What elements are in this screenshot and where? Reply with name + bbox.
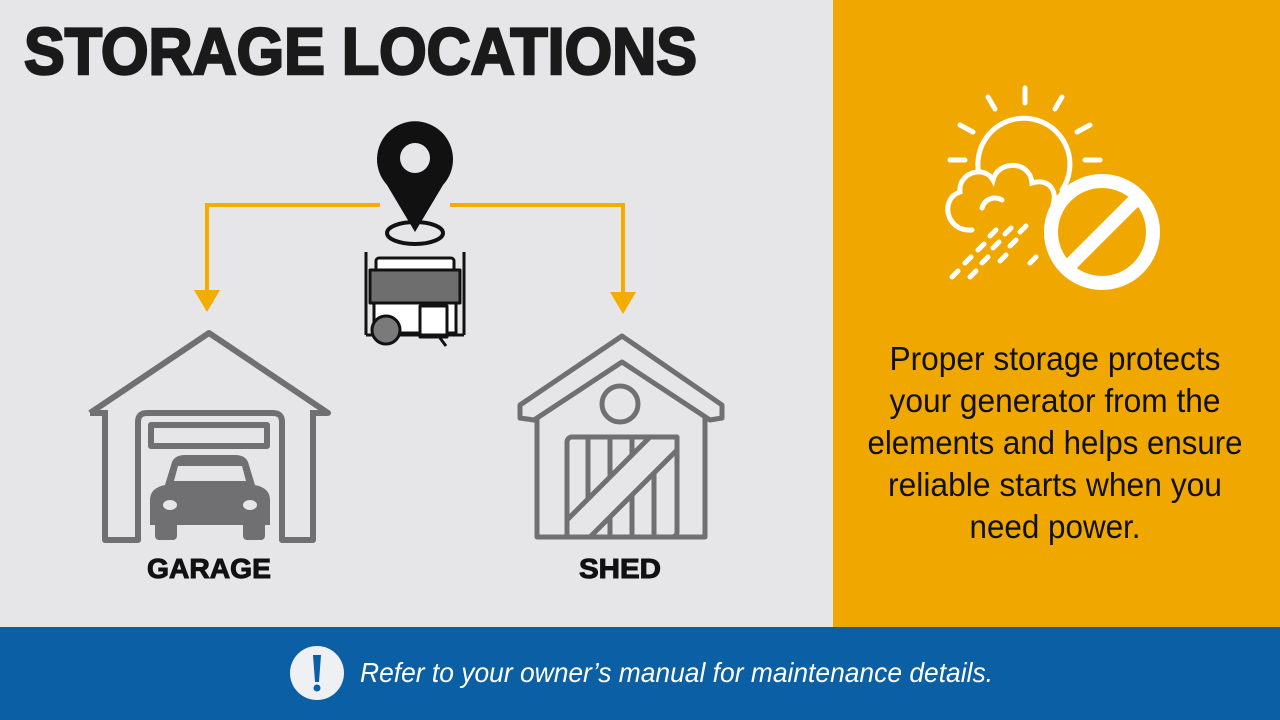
text: footer note: Refer to your owner’s manual for maintenance details.	[360, 657, 993, 688]
arrows: to garage and shed	[194, 205, 636, 314]
label: shed: SHED	[579, 553, 661, 584]
icon: garage	[90, 333, 328, 540]
text: storage benefit: reliable starts when you	[888, 466, 1222, 503]
title: STORAGE LOCATIONS	[24, 14, 697, 88]
text: storage benefit: elements and helps ensure	[868, 424, 1242, 461]
icon: exclamation	[290, 646, 344, 700]
text: storage benefit	[868, 340, 1242, 545]
icon: generator	[366, 252, 464, 346]
text: storage benefit: need power.	[970, 508, 1140, 545]
text: storage benefit: Proper storage protects	[890, 340, 1220, 377]
panel: right orange info	[833, 0, 1280, 627]
icon: shed	[520, 336, 722, 537]
text: storage benefit: your generator from the	[890, 382, 1220, 419]
icon: weather prohibited	[948, 88, 1153, 283]
label: garage: GARAGE	[147, 553, 271, 584]
icon: location pin	[377, 121, 453, 244]
footer banner	[0, 627, 1280, 720]
